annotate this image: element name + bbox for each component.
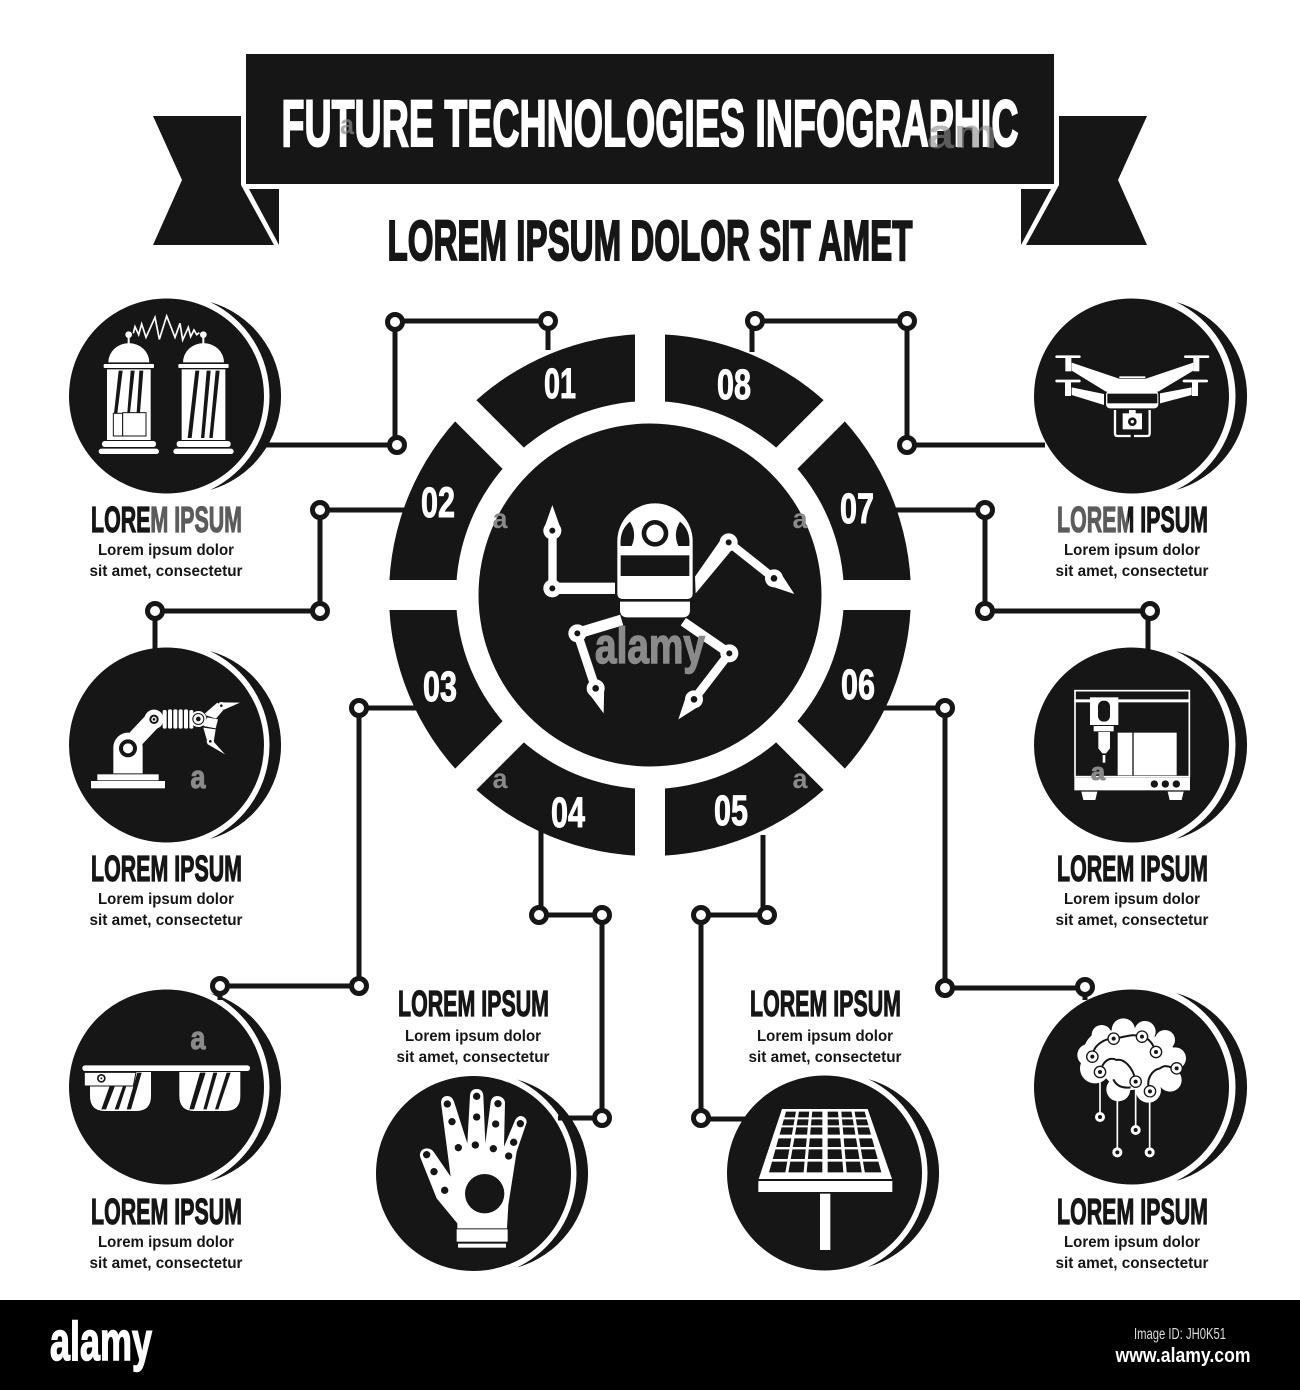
label 2: sit amet, consectetur [90, 912, 242, 929]
connector 03 [212, 700, 420, 1000]
label 5: LOREM IPSUM [750, 983, 901, 1024]
label 3: Lorem ipsum dolor [98, 1234, 234, 1251]
label 6 [1056, 1191, 1208, 1272]
icon: spider robot [543, 503, 794, 719]
connector 07 [895, 502, 1158, 655]
icon: robotic arm [91, 702, 240, 788]
watermarks: a [792, 503, 808, 534]
number 01: 01 [544, 360, 576, 408]
watermarks: a [792, 763, 808, 794]
label 6: Lorem ipsum dolor [1064, 1234, 1200, 1251]
footer bar [0, 1300, 1300, 1390]
icon: drone [1055, 355, 1209, 436]
number 04: 04 [551, 789, 585, 837]
watermarks: a [190, 1020, 206, 1056]
label 3 [90, 1191, 242, 1272]
label 4: sit amet, consectetur [396, 1049, 550, 1066]
watermarks: alamy [595, 618, 705, 674]
title banner [153, 54, 1147, 245]
icon: circuit brain [1077, 1018, 1186, 1157]
number 07: 07 [840, 485, 874, 533]
label 4: LOREM IPSUM [398, 983, 549, 1024]
connector 04 [532, 825, 610, 1126]
label 1: LOREM IPSUM [91, 499, 242, 540]
label 6: sit amet, consectetur [1056, 1255, 1208, 1272]
number 03: 03 [423, 663, 457, 711]
label 5: Lorem ipsum dolor [757, 1028, 893, 1045]
label 7: Lorem ipsum dolor [1064, 891, 1200, 908]
label 2: Lorem ipsum dolor [98, 891, 234, 908]
icon: sensor glove [420, 1089, 527, 1248]
icon: smart glasses [82, 1065, 250, 1111]
connector 06 [880, 700, 1092, 1000]
label 2 [90, 848, 242, 929]
label 2: LOREM IPSUM [91, 848, 242, 889]
connector 02 [148, 502, 405, 655]
watermarks: a [492, 503, 508, 534]
label 8: Lorem ipsum dolor [1064, 542, 1200, 559]
watermarks: am [927, 110, 997, 157]
label 4 [396, 983, 550, 1066]
label 1 [90, 499, 244, 580]
label 8: sit amet, consectetur [1056, 563, 1208, 580]
label 5 [748, 983, 902, 1066]
number 02: 02 [421, 479, 455, 527]
connector 01 [262, 314, 556, 452]
circle badge 5: solar panel [727, 1076, 939, 1270]
footer url: www.alamy.com [1115, 1345, 1250, 1367]
connector 05 [694, 835, 774, 1126]
footer image id: Image ID: JH0K51 [1134, 1326, 1226, 1343]
circle badge 7: 3D printer [1034, 648, 1247, 842]
circle badge 1: tesla coils [69, 298, 281, 494]
subtitle: LOREM IPSUM DOLOR SIT AMET [388, 209, 913, 273]
watermarks: a [1091, 759, 1106, 786]
circle badge 3: smart glasses [69, 990, 281, 1184]
icon: solar panel [758, 1109, 892, 1250]
watermarks: a [340, 109, 354, 140]
circle badge 8: drone [1034, 298, 1247, 494]
label 7: sit amet, consectetur [1056, 912, 1208, 929]
icon: tesla coils [99, 316, 234, 454]
number 08: 08 [717, 361, 751, 409]
label 7 [1056, 848, 1208, 929]
label 4: Lorem ipsum dolor [405, 1028, 541, 1045]
icon: 3D printer [1074, 691, 1190, 800]
footer logo: alamy [50, 1310, 152, 1372]
circle badge 2: robotic arm [69, 648, 281, 842]
central wheel [375, 320, 925, 870]
number 05: 05 [714, 787, 748, 835]
watermarks: a [190, 759, 206, 795]
label 1: Lorem ipsum dolor [98, 542, 234, 559]
label 3: sit amet, consectetur [90, 1255, 242, 1272]
label 8 [1056, 499, 1208, 580]
label 3: LOREM IPSUM [91, 1191, 242, 1232]
label 5: sit amet, consectetur [748, 1049, 902, 1066]
number 06: 06 [841, 661, 875, 709]
label 1: sit amet, consectetur [90, 563, 242, 580]
connector 08 [748, 314, 1045, 452]
circle badge 6: circuit brain [1034, 990, 1247, 1184]
watermarks: a [492, 763, 508, 794]
watermarks [190, 109, 1106, 1056]
circle badge 4: sensor glove [376, 1076, 588, 1271]
